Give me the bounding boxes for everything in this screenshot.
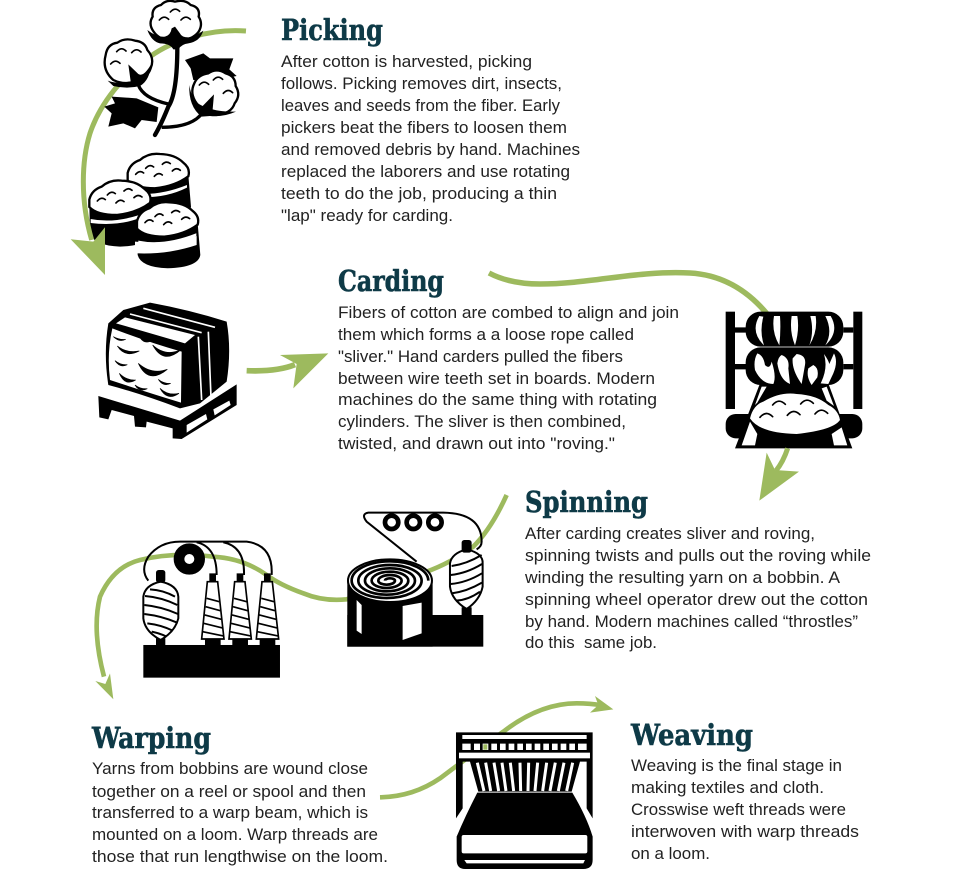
text: carding description: Fibers of cotton are combed to align and join xyxy=(338,304,679,322)
icon: loom xyxy=(456,732,593,869)
icon: cotton plant xyxy=(104,1,238,135)
text: carding description: cylinders. The sliver is then combined, xyxy=(338,413,626,431)
text: picking description: replaced the laborers and use rotating xyxy=(281,163,570,181)
text: picking description: "lap" ready for carding. xyxy=(281,207,453,225)
text: weaving description xyxy=(631,757,859,863)
text: carding description: "sliver." Hand carders pulled the fibers xyxy=(338,348,623,366)
text: spinning description: spinning twists and pulls out the roving while xyxy=(525,547,871,565)
text: warping description: transferred to a warp beam, which is xyxy=(92,804,368,822)
arrow: picking to carding xyxy=(71,31,246,275)
text: picking description: and removed debris by hand. Machines xyxy=(281,141,580,159)
text: carding description: between wire teeth set in boards. Modern xyxy=(338,370,655,388)
text: carding description xyxy=(338,304,679,453)
text: spinning description: spinning wheel operator drew out the cotton xyxy=(525,591,868,609)
text: picking description: follows. Picking removes dirt, insects, xyxy=(281,75,562,93)
arrow: warping to weaving xyxy=(380,696,613,797)
icon: spinning machine xyxy=(347,513,483,647)
text: warping description: mounted on a loom. Warp threads are xyxy=(92,826,378,844)
text: picking description xyxy=(281,53,580,225)
heading: Spinning: Spinning xyxy=(525,485,648,519)
heading: Warping: Warping xyxy=(91,721,211,755)
text: spinning description: do this same job. xyxy=(525,634,657,652)
text: weaving description: on a loom. xyxy=(631,845,710,863)
icon: warping machine xyxy=(143,542,280,678)
text: picking description: teeth to do the job, producing a thin xyxy=(281,185,557,203)
heading: Picking: Picking xyxy=(281,13,383,47)
text: carding description: them which forms a a loose rope called xyxy=(338,326,634,344)
text: weaving description: Weaving is the final stage in xyxy=(631,757,842,775)
arrow: carding to spinning xyxy=(759,448,799,501)
text: picking description: After cotton is harvested, picking xyxy=(281,53,532,71)
text: spinning description: After carding creates sliver and roving, xyxy=(525,525,815,543)
icon: baled cotton on pallet xyxy=(98,303,237,439)
text: carding description: machines do the same thing with rotating xyxy=(338,391,657,409)
icon: cotton bales xyxy=(89,154,200,268)
arrow: bale to carding machine xyxy=(247,353,328,388)
arrow: carding text to machine xyxy=(489,273,768,315)
text: spinning description xyxy=(524,525,871,652)
text: spinning description: by hand. Modern machines called “throstles” xyxy=(525,613,858,631)
text: warping description: those that run lengthwise on the loom. xyxy=(92,848,388,866)
arrow: spinning to warping xyxy=(95,495,507,699)
text: warping description: together on a reel or spool and then xyxy=(92,783,366,801)
text: weaving description: Crosswise weft threads were xyxy=(631,801,846,819)
text: weaving description: interwoven with warp threads xyxy=(631,823,859,841)
heading: Carding: Carding xyxy=(338,264,444,298)
text: picking description: pickers beat the fibers to loosen them xyxy=(281,119,567,137)
text: spinning description: winding the resulting yarn on a bobbin. A xyxy=(524,569,840,587)
text: picking description: leaves and seeds from the fiber. Early xyxy=(281,97,561,115)
text: warping description xyxy=(92,760,388,866)
text: weaving description: making textiles and cloth. xyxy=(631,779,824,797)
icon: carding machine xyxy=(726,312,862,448)
text: carding description: twisted, and drawn out into "roving." xyxy=(338,435,615,453)
heading: Weaving: Weaving xyxy=(630,718,753,752)
text: warping description: Yarns from bobbins are wound close xyxy=(92,760,368,778)
